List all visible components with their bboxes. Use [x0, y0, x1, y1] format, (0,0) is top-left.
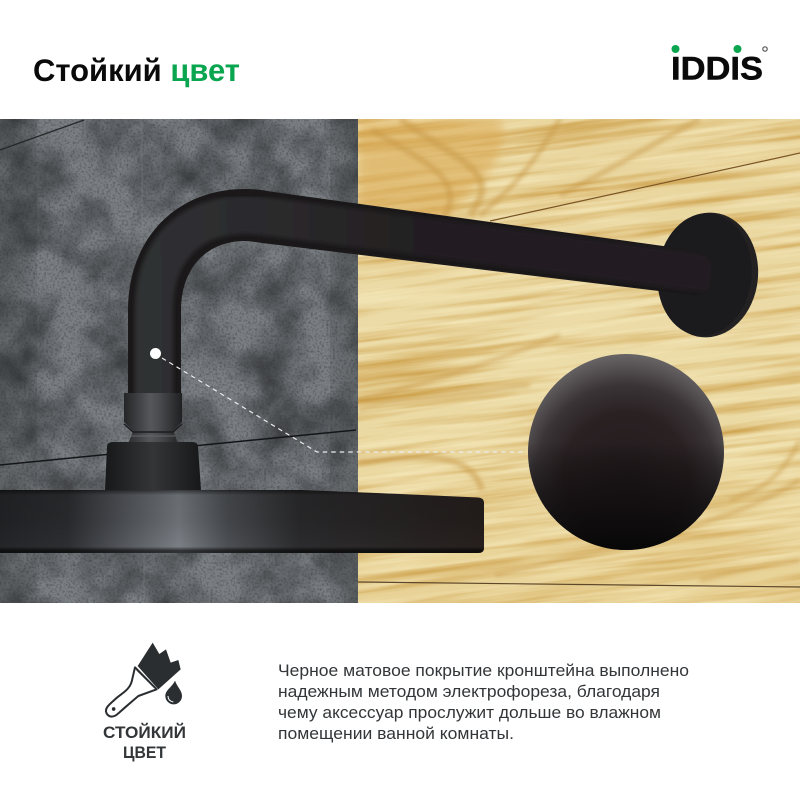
marker dot: [150, 348, 161, 359]
concrete wall: [0, 119, 358, 603]
description text: чему аксессуар прослужит дольше во влажном: [278, 703, 661, 722]
shower head plate: [0, 490, 484, 553]
logo: IDDIS: IDDIS: [671, 50, 763, 86]
magnified finish circle: [528, 354, 724, 550]
icon caption: [103, 723, 186, 762]
icon caption: СТОЙКИЙ: [103, 723, 186, 742]
icon caption: ЦВЕТ: [123, 743, 167, 762]
description text: Черное матовое покрытие кронштейна выполнено: [278, 661, 689, 680]
shower arm: [128, 189, 664, 393]
photo panel: [0, 119, 800, 603]
shower head collar: [105, 442, 201, 490]
wall mount flange: [651, 208, 764, 342]
description text: помещении ванной комнаты.: [278, 724, 514, 743]
icon: paint brush and drop: [106, 643, 182, 717]
title: Стойкий цвет: [33, 52, 240, 88]
wood wall: [358, 119, 800, 603]
description text: надежным методом электрофореза, благодаря: [278, 682, 660, 701]
arm connector: [124, 393, 182, 443]
callout dashed leader: [162, 358, 527, 452]
description text: [278, 661, 689, 743]
